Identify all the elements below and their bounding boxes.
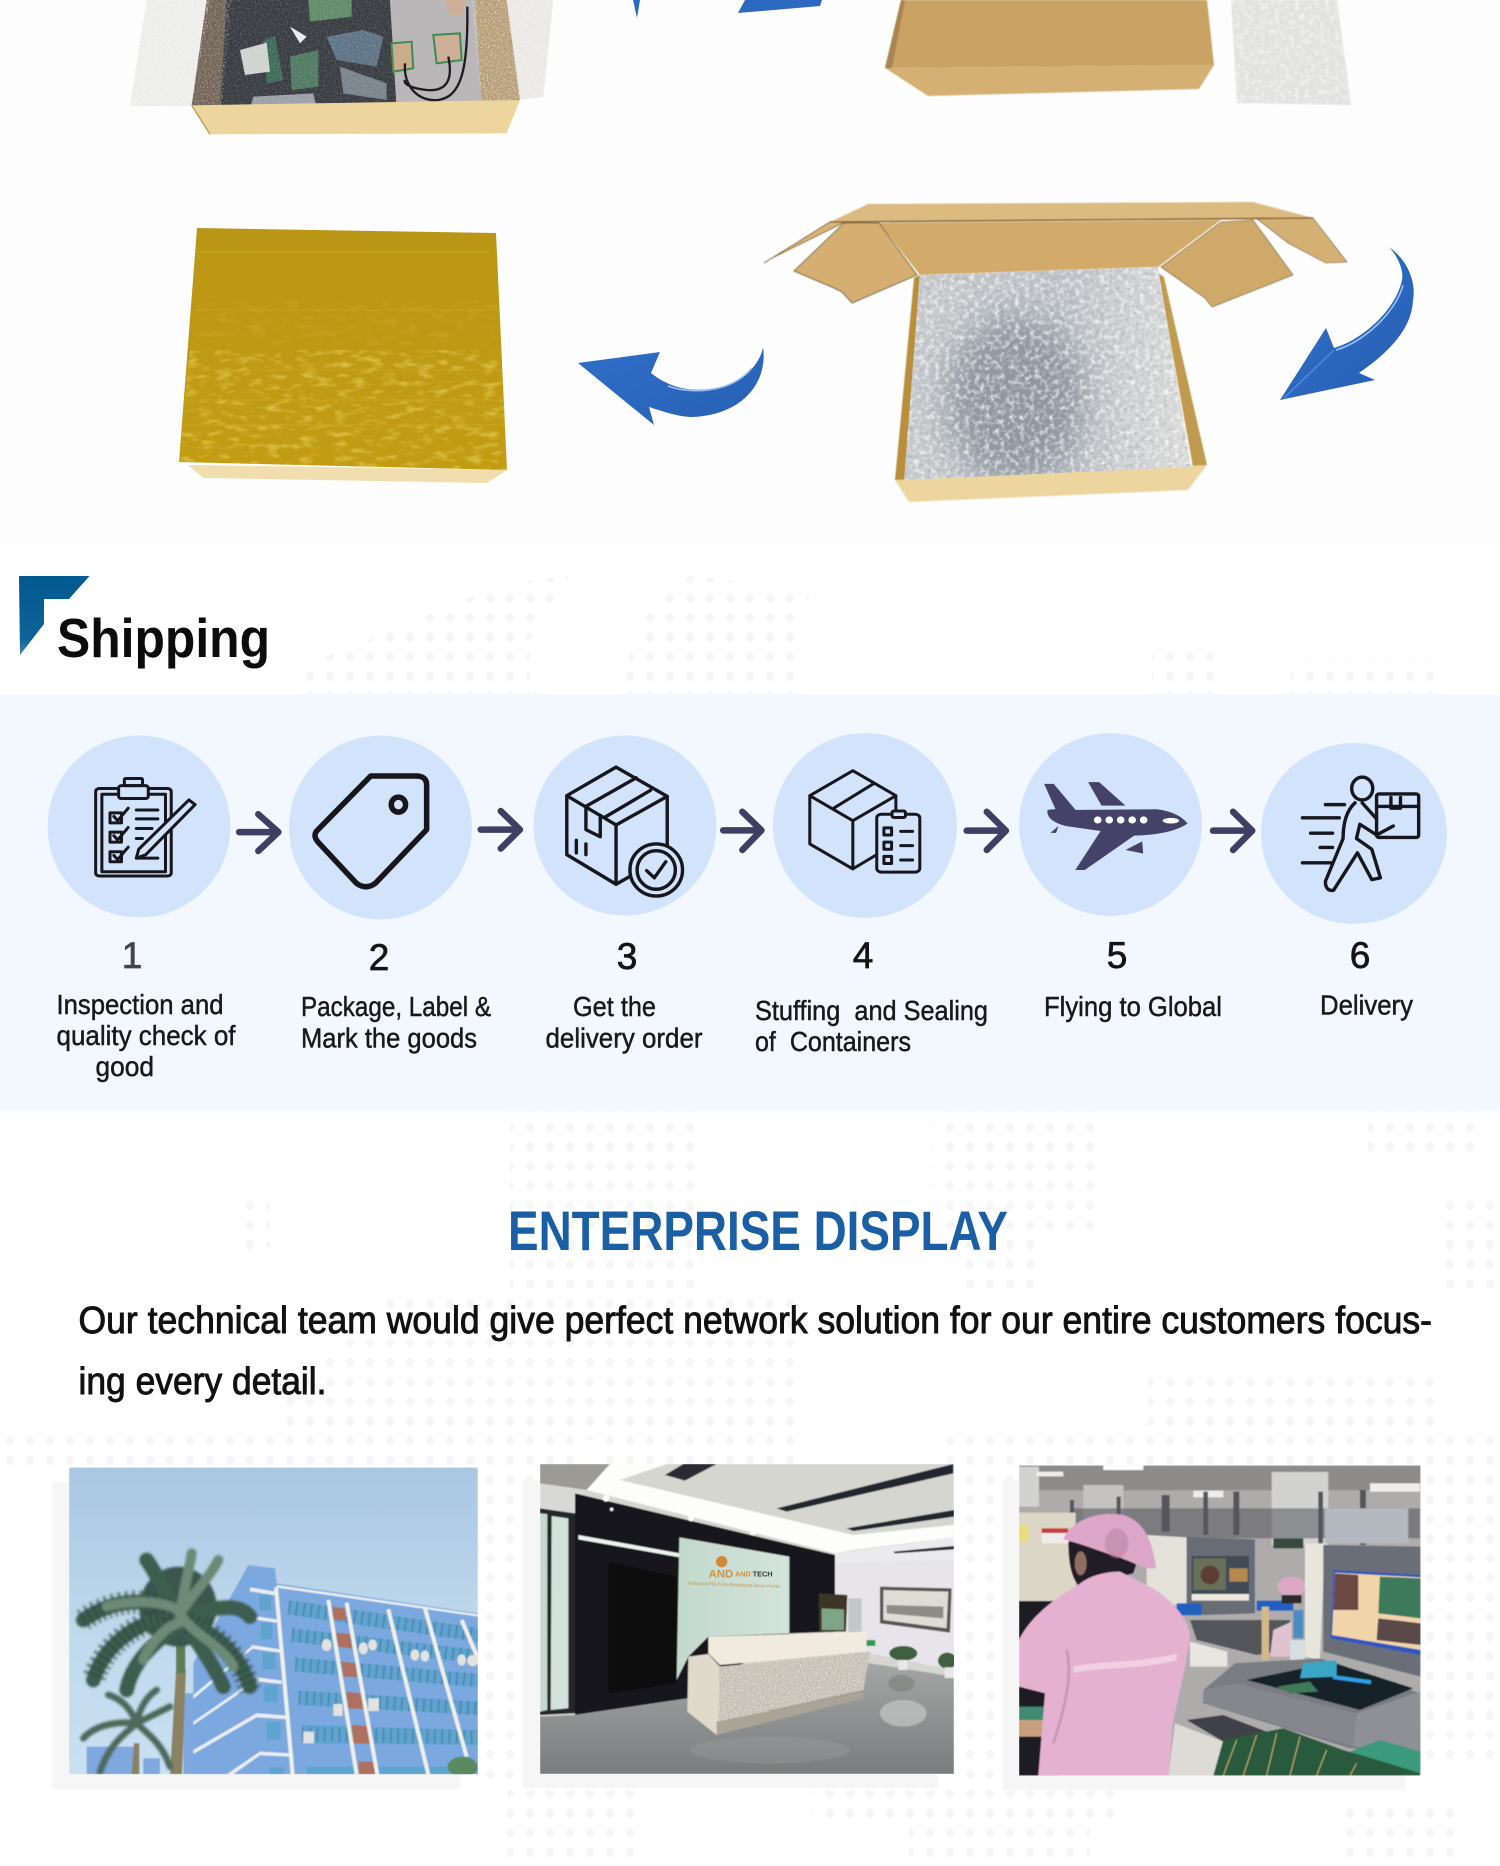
step 1 text: 1 (122, 935, 142, 976)
step 3 text (546, 936, 702, 1054)
step 5 text (1044, 935, 1222, 1022)
arrow: step 2 to 3 (481, 811, 520, 849)
step 3 text: Get the (573, 991, 656, 1022)
step 2 text: Package, Label & (301, 991, 491, 1022)
photo: reception lobby: TECH (753, 1570, 773, 1579)
text block: enterprise description: Our technical team would give perfect network solution for our entire customers focus- (78, 1300, 1432, 1342)
step 4 text: of Containers (755, 1026, 911, 1057)
step 2 text: 2 (369, 937, 389, 978)
arrow: step 5 to 6 (1213, 812, 1252, 850)
arrow: curved blue arrow left (578, 347, 764, 425)
icon: section logo mark (19, 576, 90, 655)
panel: packing photos (130, 0, 1414, 502)
step 6 text (1320, 935, 1413, 1020)
text block: enterprise description (78, 1300, 1432, 1403)
step 2 text (301, 937, 491, 1054)
photo: factory worker at inspection machine (1019, 1465, 1421, 1776)
icon: clipboard checklist (96, 779, 195, 876)
photo: empty cardboard box and bubble wrap (885, 0, 1351, 105)
arrow: curved blue arrow right (1280, 247, 1414, 400)
arrow: step 1 to 2 (239, 814, 278, 851)
photo: gold sealed box (179, 228, 507, 483)
photo: company building with palm trees (69, 1467, 478, 1777)
step 1 text: good (96, 1051, 154, 1082)
icon: airplane (1044, 782, 1188, 870)
step 3 text: 3 (617, 936, 637, 977)
step 4 text: 4 (853, 935, 873, 976)
step 1 text (56, 935, 236, 1082)
step 6 text: 6 (1350, 935, 1370, 976)
step 1 text: Inspection and (56, 989, 224, 1020)
photo: reception lobby (540, 1464, 957, 1774)
icon: delivery runner (1302, 777, 1419, 890)
photo: reception lobby: AND (735, 1570, 751, 1579)
panel: shipping steps (0, 694, 1500, 1111)
panel: enterprise photos (52, 1464, 1421, 1790)
step 4 text (755, 935, 988, 1057)
step 5 text: 5 (1107, 935, 1127, 976)
photo: box with boards in bubble wrap (130, 0, 553, 134)
heading: ENTERPRISE DISPLAY: ENTERPRISE DISPLAY (508, 1199, 1008, 1262)
photo: open box with bubble wrap (764, 202, 1347, 502)
heading: Shipping (19, 576, 270, 669)
icon: parcel with check mark (567, 767, 683, 896)
step 1 text: quality check of (56, 1020, 236, 1051)
step 4 text: Stuffing and Sealing (755, 995, 988, 1026)
arrow: step 4 to 5 (967, 812, 1006, 850)
icon: price tag (315, 776, 427, 887)
step 3 text: delivery order (546, 1022, 702, 1054)
step circles (48, 733, 1447, 924)
photo: reception lobby: Professional PCB PCBA Manufacturing Service Provider (688, 1581, 781, 1589)
photo shadows (52, 1480, 1405, 1790)
step 2 text: Mark the goods (301, 1022, 477, 1054)
step 6 text: Delivery (1320, 990, 1413, 1020)
step 5 text: Flying to Global (1044, 991, 1222, 1022)
text block: enterprise description: ing every detail. (78, 1361, 326, 1403)
arrow: step 3 to 4 (723, 812, 761, 850)
arrow: curved blue arrow partial top (633, 0, 822, 18)
icon: box with clipboard (810, 771, 920, 872)
photo: reception lobby: AND (709, 1568, 733, 1580)
heading text: Shipping (57, 607, 270, 669)
